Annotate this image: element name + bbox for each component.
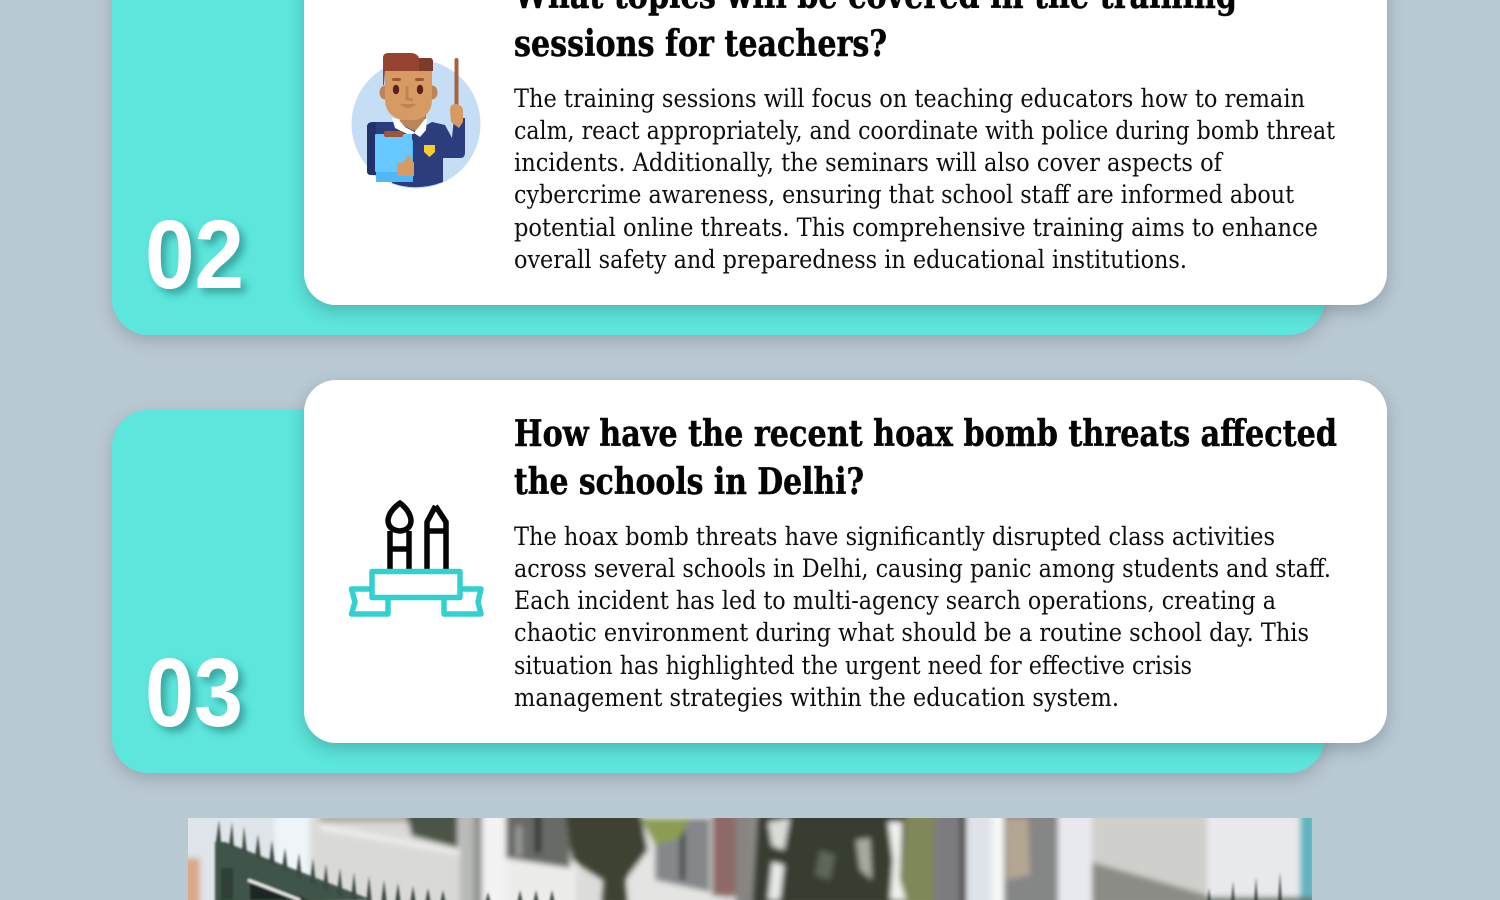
- heading: question 03: [514, 413, 1337, 503]
- body text: answer 03: [514, 522, 1331, 712]
- body text: answer 02: calm, react appropriately, and coordinate with police during bomb threat: [514, 116, 1335, 145]
- body text: answer 03: across several schools in Delhi, causing panic among students and staff.: [514, 554, 1331, 583]
- body text: answer 03: situation has highlighted the urgent need for effective crisis: [514, 651, 1192, 680]
- brush and pencil: [388, 503, 446, 570]
- body text: answer 02: potential online threats. This comprehensive training aims to enhance: [514, 213, 1318, 242]
- photo: school building with fence and tree: [180, 810, 1317, 900]
- body text: answer 02: overall safety and preparedness in educational institutions.: [514, 245, 1187, 274]
- clipboard: [376, 140, 413, 182]
- collar: [392, 118, 416, 135]
- icon: paint brush and pencil on ribbon: [352, 503, 481, 614]
- gate: [215, 842, 372, 900]
- icon: teacher with pointer and clipboard: [352, 53, 480, 188]
- lower wall: [506, 850, 576, 900]
- body text: answer 03: Each incident has led to multi-agency search operations, creating a: [514, 586, 1276, 615]
- heading: question 03: How have the recent hoax bomb threats affected: [514, 413, 1337, 455]
- right wall and stair: [1093, 818, 1206, 892]
- body text: answer 03: The hoax bomb threats have significantly disrupted class activities: [514, 522, 1275, 551]
- panel: question 02: [106, 0, 1394, 347]
- upper window: [405, 810, 458, 848]
- teal backing card 02: [112, 0, 1325, 335]
- white content card 02: [304, 0, 1387, 305]
- body text: answer 03: management strategies within the education system.: [514, 683, 1119, 712]
- body text: answer 02: The training sessions will focus on teaching educators how to remain: [514, 84, 1305, 113]
- holding hand: [397, 155, 414, 176]
- orange background detail: [188, 854, 204, 900]
- white content card 03: [304, 380, 1387, 743]
- wall: [407, 818, 458, 845]
- pointer stick: [454, 58, 458, 108]
- heading: question 03: the schools in Delhi?: [514, 461, 864, 503]
- heading: question 02: [513, 0, 1237, 65]
- eyes, brows, nose, mouth: [393, 85, 399, 94]
- heading: question 02: sessions for teachers?: [514, 23, 887, 65]
- fence spikes: [216, 820, 1282, 900]
- right tree: [754, 818, 759, 827]
- body text: answer 03: chaotic environment during what should be a routine school day. This: [514, 618, 1309, 647]
- jacket: [367, 118, 465, 187]
- teal backing card 03: [112, 410, 1325, 773]
- number 03: 03: [145, 638, 243, 747]
- white spots in foliage: [768, 818, 790, 850]
- body text: answer 02: [514, 84, 1335, 274]
- pillar: [460, 810, 474, 900]
- windows right: [935, 810, 965, 900]
- head: [385, 62, 432, 120]
- badge: [424, 145, 435, 157]
- neck: [400, 110, 426, 131]
- raised hand: [450, 104, 463, 128]
- number 02: 02: [145, 200, 244, 309]
- body text: answer 02: cybercrime awareness, ensuring that school staff are informed about: [514, 180, 1294, 209]
- body text: answer 02: incidents. Additionally, the seminars will also cover aspects of: [514, 148, 1224, 177]
- ears: [380, 86, 390, 100]
- ribbon: [352, 572, 481, 614]
- hair: [383, 53, 433, 85]
- window: [506, 810, 570, 868]
- panel: question 03: [106, 379, 1394, 785]
- tree: [565, 810, 648, 900]
- sky: [188, 818, 275, 900]
